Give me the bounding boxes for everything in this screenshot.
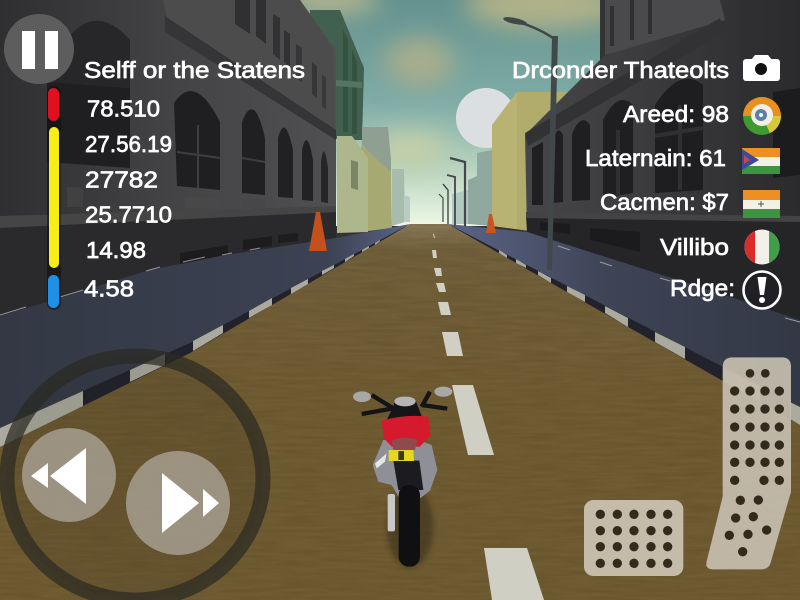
sky [300, 0, 600, 226]
left stats list: 25.7710 [85, 202, 172, 228]
distant left buildings [310, 10, 410, 233]
moon [456, 88, 516, 148]
street lamps [439, 16, 558, 270]
right stats list [512, 57, 735, 301]
tyre [399, 485, 420, 567]
mirrors and handlebars [353, 387, 452, 414]
left stats list: 4.58 [84, 276, 134, 302]
right stats list: Rdge: [670, 275, 735, 301]
icon: camera [743, 55, 780, 81]
sidewalk lane markings [0, 246, 800, 322]
left sidewalk [0, 224, 410, 428]
left stats list: 27782 [85, 166, 158, 192]
right steer button [126, 451, 230, 555]
rear fender [393, 461, 423, 490]
exhaust [388, 494, 395, 531]
right stats list: Villibo [660, 234, 729, 260]
icon: warning [744, 272, 780, 308]
icon: striped flag with triangle [742, 148, 780, 174]
left stats list [84, 57, 305, 302]
brake pedal [584, 500, 683, 576]
right stats list: Laternain: 61 [585, 145, 726, 171]
left stats list: 78.510 [87, 96, 160, 122]
road centre dashes [432, 234, 544, 600]
left curb [0, 224, 410, 447]
red body [382, 416, 431, 447]
stats heading: Selff or the Statens [84, 57, 305, 83]
licence plate [389, 450, 414, 461]
right building [525, 0, 800, 320]
right stats list: Areed: 98 [623, 101, 729, 127]
traffic cone left [309, 212, 327, 251]
right sidewalk [448, 224, 800, 407]
distant right buildings [452, 92, 576, 237]
left stats list: 27.56.19 [85, 131, 172, 157]
icon: round italian flag [744, 230, 780, 264]
pause button [4, 14, 74, 84]
silver panels [373, 438, 437, 498]
joystick ring [7, 356, 263, 600]
left building [0, 0, 336, 316]
right curb [448, 224, 800, 425]
traffic cone right [486, 214, 496, 233]
status level bar [47, 86, 61, 310]
road [0, 224, 800, 600]
accelerator pedal [706, 357, 791, 569]
icon: tricolour flag [743, 190, 780, 218]
icon: round badge [743, 97, 781, 135]
motorcycle [353, 387, 452, 568]
right stats list: Cacmen: $7 [600, 189, 729, 215]
left stats list: 14.98 [86, 237, 146, 263]
right heading: Drconder Thateolts [512, 57, 729, 83]
headlight and fairing [387, 396, 423, 420]
left steer button [22, 428, 116, 522]
